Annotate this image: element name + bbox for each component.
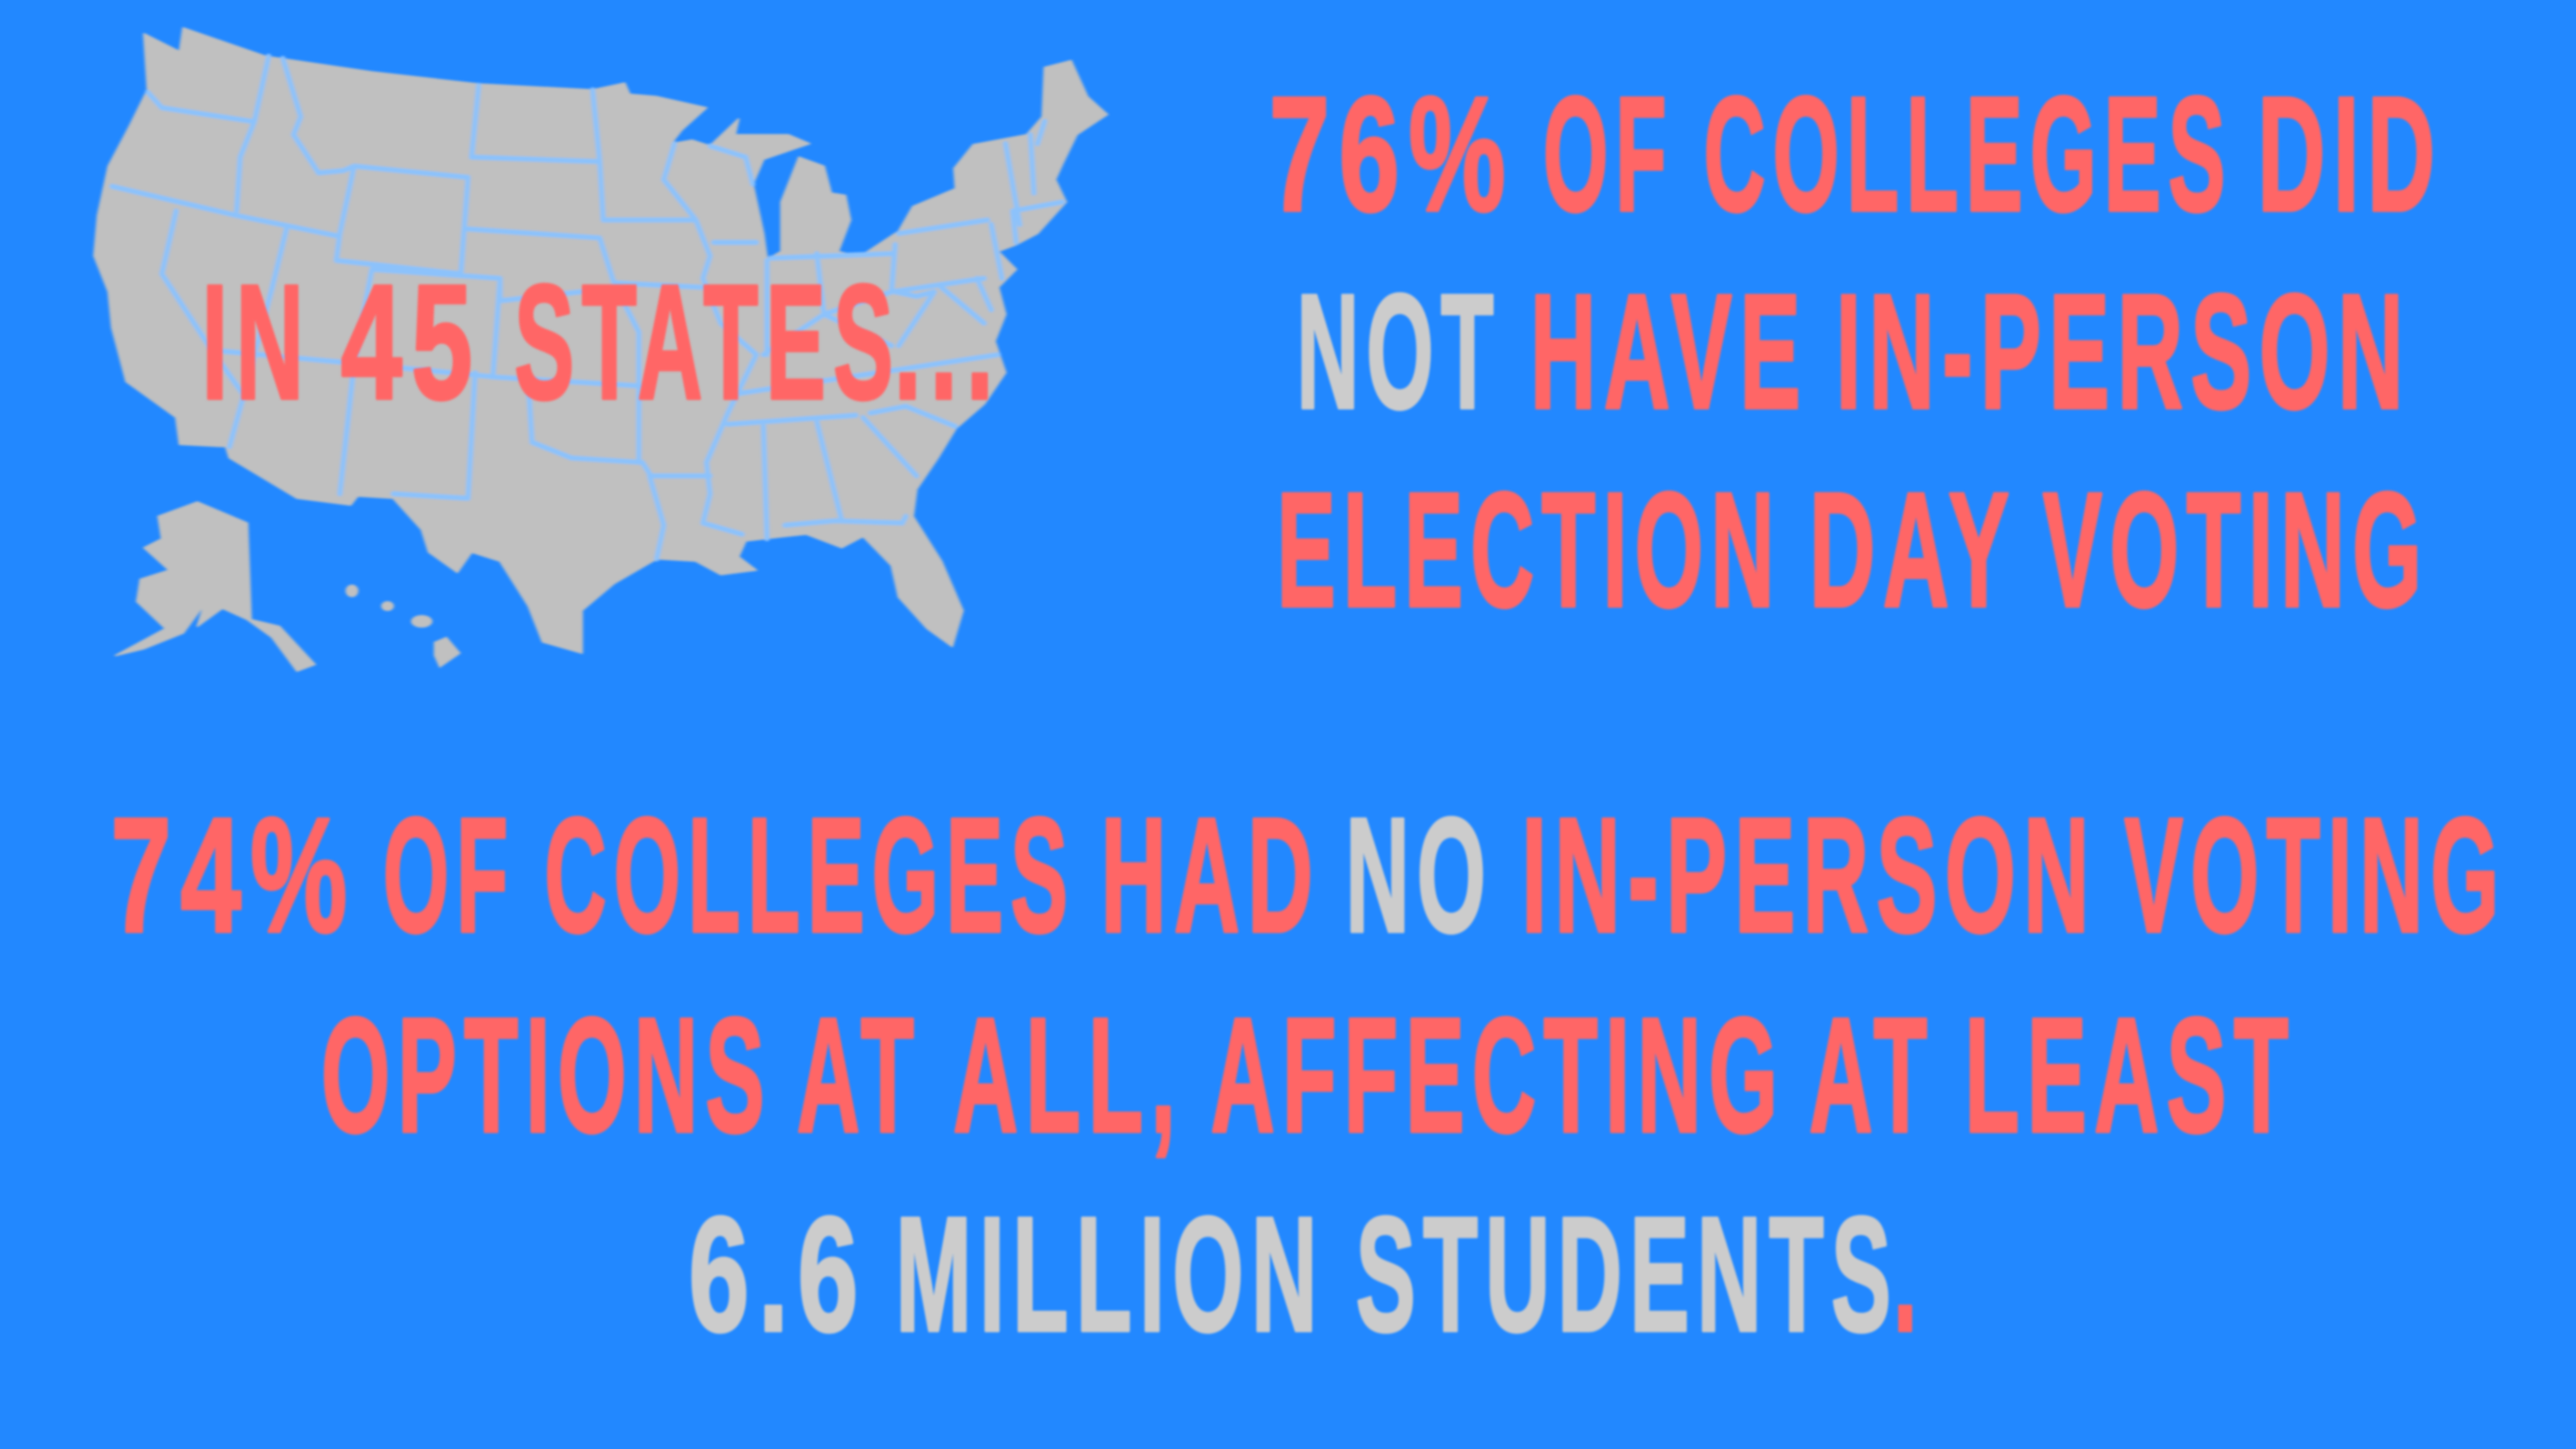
- map caption: in 45 states: STATES: [514, 252, 901, 433]
- line: 6.6 million students: MILLION: [896, 1184, 1325, 1366]
- line: election day voting: DAY: [1809, 459, 2017, 641]
- line: options at all, affecting at least: AFFECTING: [1211, 985, 1785, 1167]
- state borders: [112, 56, 1062, 559]
- line: 74% of colleges had no in-person voting: OF: [383, 785, 515, 967]
- line: 6.6 million students: STUDENTS: [1356, 1184, 1899, 1366]
- Hawaii: [345, 585, 461, 668]
- line: options at all, affecting at least: ALL,: [953, 985, 1183, 1167]
- map caption: in 45 states: IN: [202, 252, 312, 433]
- line: options at all, affecting at least: LEAST: [1965, 985, 2296, 1167]
- map caption: in 45 states: 45: [341, 252, 482, 433]
- line: not have in-person: NOT: [1297, 261, 1501, 443]
- statement: 76% of colleges did not have in-person election day voting: [1269, 64, 2443, 641]
- line: 76% of colleges did: OF: [1543, 64, 1674, 246]
- line: 6.6 million students: 6.6: [689, 1184, 867, 1366]
- line: options at all, affecting at least: AT: [1809, 985, 1935, 1167]
- line: 74% of colleges had no in-person voting: NO: [1346, 785, 1493, 967]
- line: not have in-person: [1297, 261, 2411, 443]
- line: 74% of colleges had no in-person voting: [111, 785, 2506, 967]
- line: election day voting: ELECTION: [1277, 459, 1782, 641]
- line: options at all, affecting at least: OPTIONS: [321, 985, 772, 1167]
- line: options at all, affecting at least: AT: [797, 985, 921, 1167]
- line: 74% of colleges had no in-person voting: IN-PERSON: [1522, 785, 2097, 967]
- line: 6.6 million students: .: [1893, 1184, 1924, 1366]
- line: 76% of colleges did: [1269, 64, 2443, 246]
- line: not have in-person: HAVE: [1530, 261, 1808, 443]
- Alaska: [116, 502, 315, 671]
- map caption: in 45 states: ...: [894, 252, 1002, 433]
- line: 74% of colleges had no in-person voting: 74%: [111, 785, 356, 967]
- line: 76% of colleges did: 76%: [1269, 64, 1515, 246]
- line: 74% of colleges had no in-person voting: HAD: [1101, 785, 1321, 967]
- map caption: in 45 states: [202, 252, 1002, 433]
- line: 74% of colleges had no in-person voting: COLLEGES: [544, 785, 1075, 967]
- statement: 74% of colleges had no in-person voting options: [111, 785, 2506, 1366]
- line: options at all, affecting at least: [321, 985, 2296, 1167]
- contiguous states silhouette: [94, 27, 1108, 653]
- icon: map of the United States: [94, 27, 1108, 671]
- line: 6.6 million students: [689, 1184, 1924, 1366]
- line: 76% of colleges did: DID: [2257, 64, 2443, 246]
